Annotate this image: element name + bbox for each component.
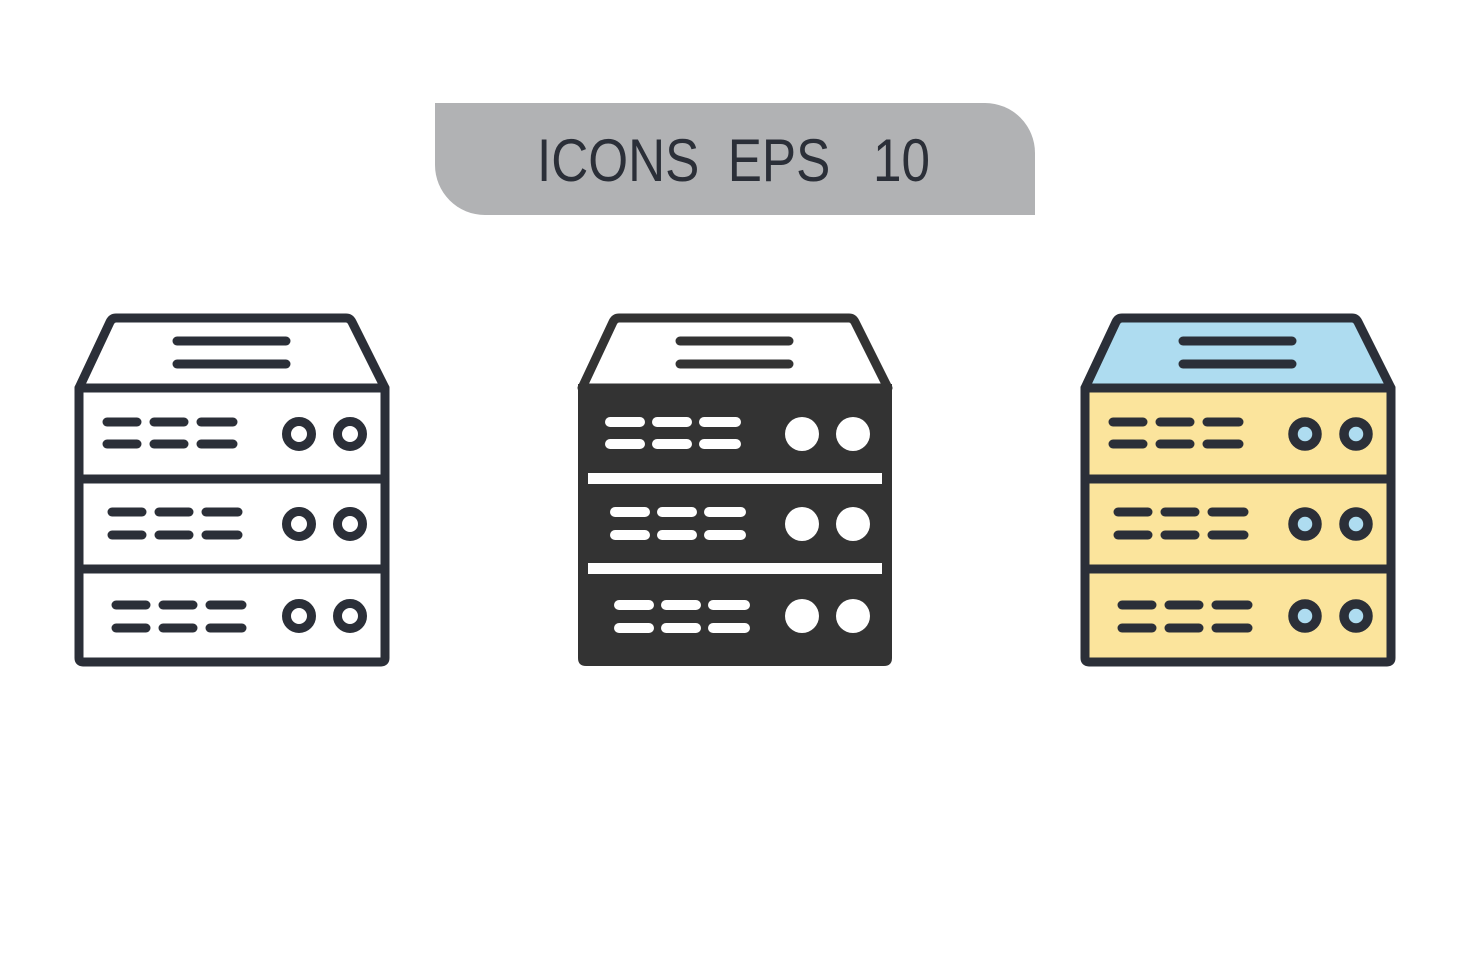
icon: server color	[1085, 318, 1391, 662]
header banner	[435, 103, 1035, 215]
icon: server outline	[79, 318, 385, 662]
icon: server solid	[578, 318, 892, 666]
header banner: ICONS EPS 10	[537, 127, 930, 194]
